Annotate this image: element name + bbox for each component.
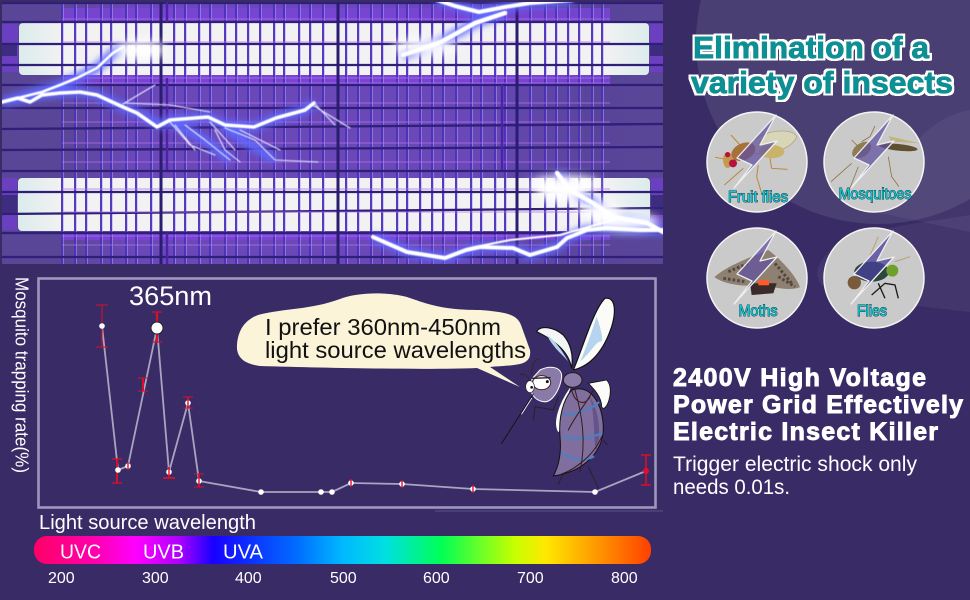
eyes (533, 376, 551, 390)
grid wires (2, 2, 663, 264)
data points (99, 322, 649, 495)
peak label: 365nm: 365nm (129, 281, 212, 311)
wavelength tick labels: 700 (517, 570, 544, 587)
spectrum labels: UVA (223, 542, 264, 564)
x axis title: Light source wavelength (39, 512, 256, 534)
wavelength tick labels: 800 (611, 570, 638, 587)
decorative background circles (696, 0, 970, 312)
insect badge: flies (824, 228, 924, 328)
wavelength tick labels: 200 (48, 570, 75, 587)
icon: moth (714, 250, 800, 295)
heading: high voltage power grid: 2400V High Voltage (673, 364, 926, 392)
bubble text: I prefer 360nm-450nm (265, 314, 501, 340)
icon: lightning bolt (734, 231, 777, 304)
text block: trigger time (673, 453, 918, 499)
lightning bolts (2, 0, 663, 258)
illustration: cartoon mosquito (502, 298, 614, 488)
heading: high voltage power grid: Power Grid Effectively (673, 391, 963, 419)
photo: electrified lamp grid with lightning (2, 0, 663, 264)
icon: lightning bolt (734, 115, 777, 188)
spectrum labels: UVB (143, 542, 184, 564)
label: moths: Moths (738, 303, 778, 320)
bubble text (265, 314, 526, 363)
lightning glow (2, 0, 663, 258)
icon: fruit fly (715, 131, 797, 193)
bubble text: light source wavelengths (265, 337, 526, 363)
shoulder (563, 373, 582, 387)
spectrum bar (34, 536, 651, 564)
wavelength tick labels: 400 (235, 570, 262, 587)
net lines (562, 390, 602, 474)
chart frame (38, 278, 656, 508)
label: mosquitoes: Mosquitoes (838, 186, 912, 203)
wings (537, 298, 614, 370)
abdomen (553, 389, 603, 476)
text block: trigger time: Trigger electric shock only (673, 453, 918, 476)
legs (533, 397, 607, 488)
error bars (96, 305, 651, 487)
wavelength tick labels: 600 (423, 570, 450, 587)
heading: high voltage power grid: Electric Insect Killer (673, 418, 938, 446)
wavelength tick labels: 300 (142, 570, 169, 587)
lightning bright flares (114, 39, 659, 230)
lamp tube top (19, 23, 649, 75)
head (530, 367, 562, 402)
icon: mosquito photo (831, 126, 920, 197)
lamp tube bottom (18, 178, 650, 231)
tube end caps (2, 24, 663, 230)
abdomen bands (562, 403, 602, 460)
chart: trapping rate by wavelength (38, 278, 663, 511)
heading: elimination of insects: Elimination of a (693, 30, 930, 65)
icon: lightning bolt (851, 231, 894, 304)
wavelength tick labels: 500 (330, 570, 357, 587)
purple glow bands (62, 8, 610, 240)
insect badge: fruit flies (707, 112, 807, 212)
wavelength tick labels (48, 570, 638, 587)
back wing panels (588, 380, 610, 408)
insect badge: mosquitoes (824, 112, 924, 212)
icon: lightning bolt (851, 115, 894, 188)
antennae (520, 359, 538, 380)
heading: elimination of insects: variety of insects (691, 65, 953, 100)
speech bubble (237, 293, 530, 387)
spectrum labels (60, 542, 264, 564)
text block: trigger time: needs 0.01s. (673, 476, 790, 499)
heading: elimination of insects (691, 30, 953, 100)
y axis title: Mosquito trapping rate(%) (12, 277, 32, 473)
label: fruit flies: Fruit flies (728, 189, 788, 206)
spectrum labels: UVC (60, 542, 101, 564)
heading: high voltage power grid (673, 364, 963, 446)
icon: fly (848, 237, 910, 298)
label: flies: Flies (857, 303, 887, 320)
proboscis (502, 394, 533, 443)
data line (102, 326, 646, 492)
insect badge: moths (707, 228, 807, 328)
